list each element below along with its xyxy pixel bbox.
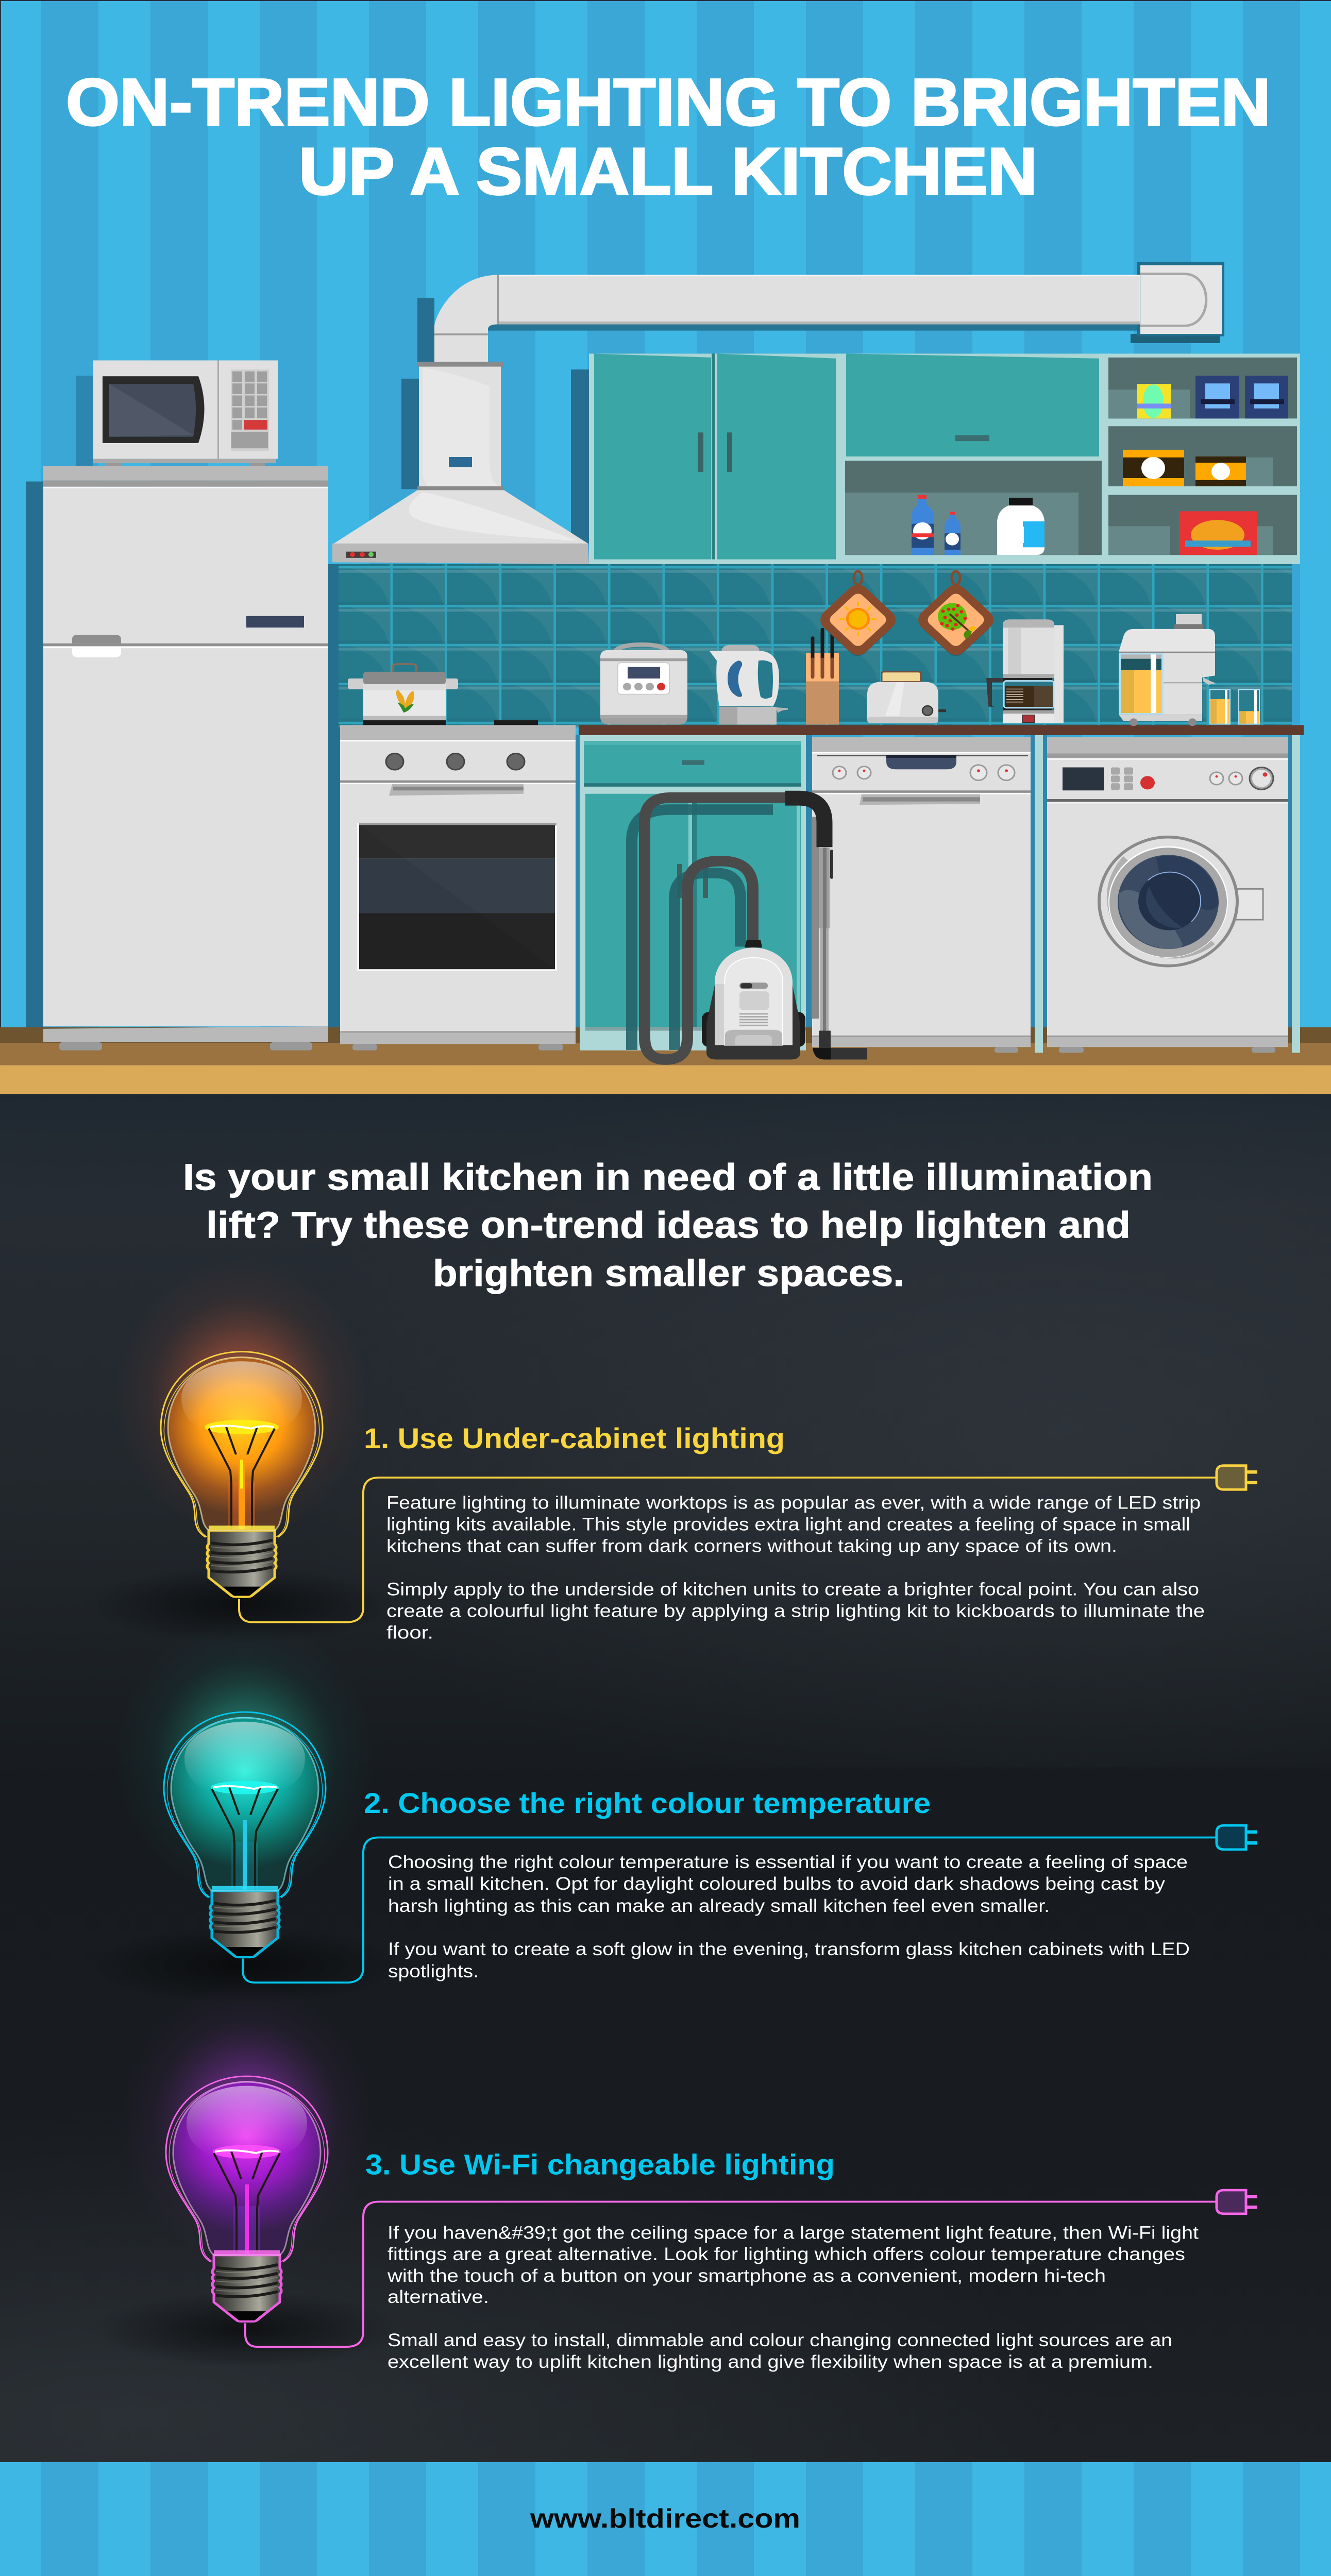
washing machine: [1047, 737, 1288, 1053]
coffee machine: [986, 619, 1064, 723]
section 1: [87, 1258, 1257, 1643]
connector wire and plug 2: [243, 1825, 1257, 1982]
upper cabinets: [589, 353, 1300, 564]
floor: [0, 1027, 1331, 1094]
kettle: [710, 645, 788, 724]
section 3: [92, 1982, 1257, 2372]
header background: [0, 0, 1331, 1095]
tiled backsplash: [339, 564, 1300, 727]
body text 3: Small and easy to install, dimmable and colour changing connected light sources are an: [387, 2330, 1172, 2350]
footer band: [0, 2462, 1331, 2576]
title: [66, 65, 1271, 209]
glow 3: [92, 1982, 401, 2368]
heading 2: 2. Choose the right colour temperature: [364, 1787, 931, 1819]
dark content panel: [0, 1094, 1331, 2462]
glow 1: [87, 1258, 396, 1643]
body text 3: If you haven&#39;t got the ceiling space for a large statement light feature, then Wi-Fi light: [387, 2222, 1199, 2243]
juicer: [1119, 614, 1216, 726]
rice cooker: [600, 642, 687, 724]
juice glasses: [1210, 689, 1259, 724]
body text 3: alternative.: [387, 2286, 489, 2307]
body text 3: fittings are a great alternative. Look for lighting which offers colour temperature changes: [387, 2244, 1185, 2264]
toaster: [867, 672, 946, 723]
stove and oven: [340, 725, 576, 1050]
body text 1: kitchens that can suffer from dark corners without taking up any space of its own.: [386, 1536, 1117, 1556]
dishwasher: [812, 737, 1031, 1053]
body text 3: with the touch of a button on your smartphone as a convenient, modern hi-tech: [387, 2265, 1106, 2286]
title: UP A SMALL KITCHEN: [299, 134, 1037, 209]
cabinet side panels: [1035, 735, 1300, 1053]
icon: light bulb cyan: [164, 1712, 326, 1957]
website address: www.bltdirect.com: [530, 2504, 800, 2533]
section 2: [90, 1618, 1257, 2004]
body text 2: Choosing the right colour temperature is essential if you want to create a feeling of space: [388, 1852, 1188, 1872]
body text 3: excellent way to uplift kitchen lighting and give flexibility when space is at a premium.: [387, 2351, 1153, 2372]
body text 1: floor.: [386, 1622, 433, 1642]
body text 2: spotlights.: [388, 1961, 479, 1981]
trivet: tree: [914, 571, 998, 660]
lower cabinet: [580, 735, 806, 1050]
body text 1: [386, 1493, 1205, 1642]
body text 2: in a small kitchen. Opt for daylight coloured bulbs to avoid dark shadows being cast by: [388, 1873, 1166, 1894]
intro text: brighten smaller spaces.: [433, 1252, 904, 1294]
intro text: lift? Try these on-trend ideas to help lighten and: [206, 1204, 1131, 1246]
connector wire and plug 3: [245, 2190, 1257, 2347]
trivet: sun: [816, 571, 900, 660]
heading 1: 1. Use Under-cabinet lighting: [364, 1422, 785, 1455]
body text 1: lighting kits available. This style provides extra light and creates a feeling of space in small: [386, 1514, 1190, 1534]
connector wire and plug 1: [239, 1466, 1257, 1622]
vacuum cleaner: [632, 798, 867, 1060]
ventilation duct: [434, 262, 1224, 363]
body text 1: Feature lighting to illuminate worktops is as popular as ever, with a wide range of LED strip: [386, 1493, 1201, 1513]
intro text: Is your small kitchen in need of a little illumination: [183, 1156, 1153, 1198]
shelf items: [912, 376, 1288, 555]
body text 1: Simply apply to the underside of kitchen units to create a brighter focal point. You can also: [386, 1579, 1199, 1599]
glow 2: [90, 1618, 399, 2004]
body text 1: create a colourful light feature by applying a strip lighting kit to kickboards to illuminate the: [386, 1601, 1205, 1621]
cooking pot: [348, 664, 538, 725]
kitchen illustration: [0, 262, 1331, 1094]
open shelves: [845, 358, 1297, 555]
heading 3: 3. Use Wi-Fi changeable lighting: [365, 2148, 835, 2181]
body text 2: [388, 1852, 1190, 1981]
wall shadows: [26, 298, 1292, 1027]
countertop: [579, 725, 1304, 735]
title: ON-TREND LIGHTING TO BRIGHTEN: [66, 65, 1271, 139]
body text 2: If you want to create a soft glow in the evening, transform glass kitchen cabinets with LED: [388, 1939, 1190, 1959]
knife block: [806, 630, 839, 724]
icon: light bulb magenta: [166, 2076, 328, 2321]
fridge: [43, 466, 328, 1050]
body text 3: [387, 2222, 1199, 2372]
body text 2: harsh lighting as this can make an already small kitchen feel even smaller.: [388, 1895, 1050, 1916]
extractor hood: [332, 362, 589, 564]
intro text: [183, 1156, 1153, 1294]
icon: light bulb yellow: [161, 1352, 323, 1597]
microwave: [93, 360, 278, 466]
